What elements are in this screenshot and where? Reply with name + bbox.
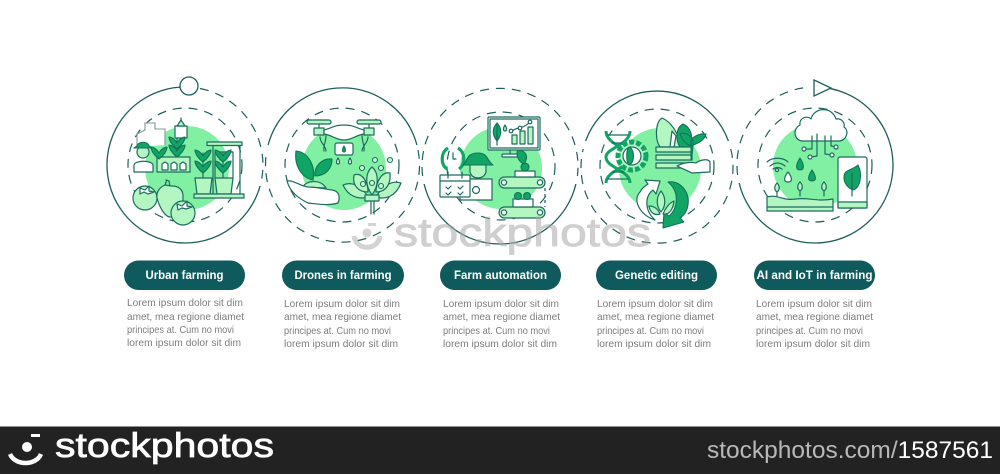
- arrow marker: [814, 80, 831, 96]
- recycle arrow: white: [637, 180, 660, 220]
- outer ring solid arc: [107, 87, 260, 243]
- text: automation description: principes at. Cum no movi: [443, 325, 550, 337]
- watermark: stockphotos: [394, 211, 651, 255]
- panel: drones in farming: [266, 88, 420, 242]
- text: automation description: [443, 298, 560, 350]
- panel: urban farming: [107, 77, 263, 243]
- text: drones description: principes at. Cum no movi: [284, 325, 391, 337]
- outer ring solid arc: [424, 184, 576, 244]
- background green circle: [145, 126, 229, 210]
- pill: Drones in farming: [282, 260, 404, 290]
- panel: AI and IoT in farming: [737, 80, 893, 243]
- icon: drone with plants: [287, 120, 401, 214]
- inner dashed ring: [600, 109, 714, 223]
- pill: Genetic editing: Genetic editing: [615, 270, 698, 282]
- text: AI and IoT description: principes at. Cum no movi: [756, 325, 863, 337]
- inner dashed ring: [285, 108, 399, 222]
- text: urban farming description: Lorem ipsum dolor sit dim: [127, 297, 243, 309]
- outer ring dashed arc: [200, 88, 263, 180]
- panel: genetic editing: [581, 91, 733, 243]
- background green circle: [773, 124, 857, 208]
- text: automation description: lorem ipsum dolor sit dim: [443, 338, 557, 350]
- icon: genetic editing: [606, 118, 710, 228]
- outer ring dashed arc: [266, 150, 420, 242]
- pill: Drones in farming: Drones in farming: [294, 270, 392, 282]
- text: AI and IoT description: Lorem ipsum dolor sit dim: [756, 298, 872, 310]
- icon: urban farm: [133, 118, 244, 225]
- text: genetic editing description: principes at. Cum no movi: [597, 325, 704, 337]
- outer ring dashed arc: [737, 88, 803, 175]
- pollen dots: [360, 158, 392, 188]
- text: urban farming description: amet, mea regione diamet: [127, 311, 244, 323]
- text: AI and IoT description: [756, 298, 873, 350]
- outer ring solid arc: [586, 91, 728, 141]
- text: urban farming description: [127, 297, 244, 349]
- outer ring dashed arc: [581, 149, 733, 243]
- outer ring dashed arc: [422, 88, 578, 176]
- background green circle: [619, 128, 701, 210]
- text: drones description: [284, 298, 401, 350]
- text: genetic editing description: lorem ipsum dolor sit dim: [597, 338, 711, 350]
- icon: automation: [440, 117, 545, 218]
- footer image URL: stockphotos.com/1587561: [707, 437, 993, 464]
- inner dashed ring: [128, 108, 242, 222]
- outer ring solid arc: [268, 88, 417, 145]
- text: automation description: Lorem ipsum dolor sit dim: [443, 298, 559, 310]
- inner dashed ring: [447, 112, 555, 220]
- icon: IoT: [767, 110, 867, 211]
- background green circle: [302, 126, 386, 210]
- pill: AI and IoT in farming: [754, 260, 875, 290]
- pill: Urban farming: Urban farming: [146, 270, 224, 282]
- text: automation description: amet, mea regione diamet: [443, 311, 560, 323]
- text: genetic editing description: Lorem ipsum dolor sit dim: [597, 298, 713, 310]
- pill: Genetic editing: [596, 260, 717, 290]
- text: genetic editing description: [597, 298, 714, 350]
- text: drones description: lorem ipsum dolor sit dim: [284, 338, 398, 350]
- panel: farm automation: [422, 88, 578, 244]
- text: genetic editing description: amet, mea regione diamet: [597, 311, 714, 323]
- pill: AI and IoT in farming: AI and IoT in farming: [756, 270, 872, 282]
- text: urban farming description: lorem ipsum dolor sit dim: [127, 337, 241, 349]
- pill: Farm automation: Farm automation: [454, 270, 547, 282]
- outer ring solid arc: [739, 88, 893, 243]
- ring start marker: [180, 77, 198, 95]
- text: AI and IoT description: lorem ipsum dolor sit dim: [756, 338, 870, 350]
- footer logo icon: [10, 434, 41, 463]
- text: drones description: amet, mea regione diamet: [284, 311, 401, 323]
- footer brand name: stockphotos: [55, 427, 274, 465]
- background green circle: [460, 127, 542, 209]
- pill: Urban farming: [124, 260, 245, 290]
- text: urban farming description: principes at. Cum no movi: [127, 324, 234, 336]
- text: drones description: Lorem ipsum dolor sit dim: [284, 298, 400, 310]
- text: AI and IoT description: amet, mea regione diamet: [756, 311, 873, 323]
- recycle arrow: dark: [663, 182, 688, 228]
- pill: Farm automation: [440, 260, 561, 290]
- footer bar: [0, 426, 1000, 474]
- inner dashed ring: [758, 108, 872, 222]
